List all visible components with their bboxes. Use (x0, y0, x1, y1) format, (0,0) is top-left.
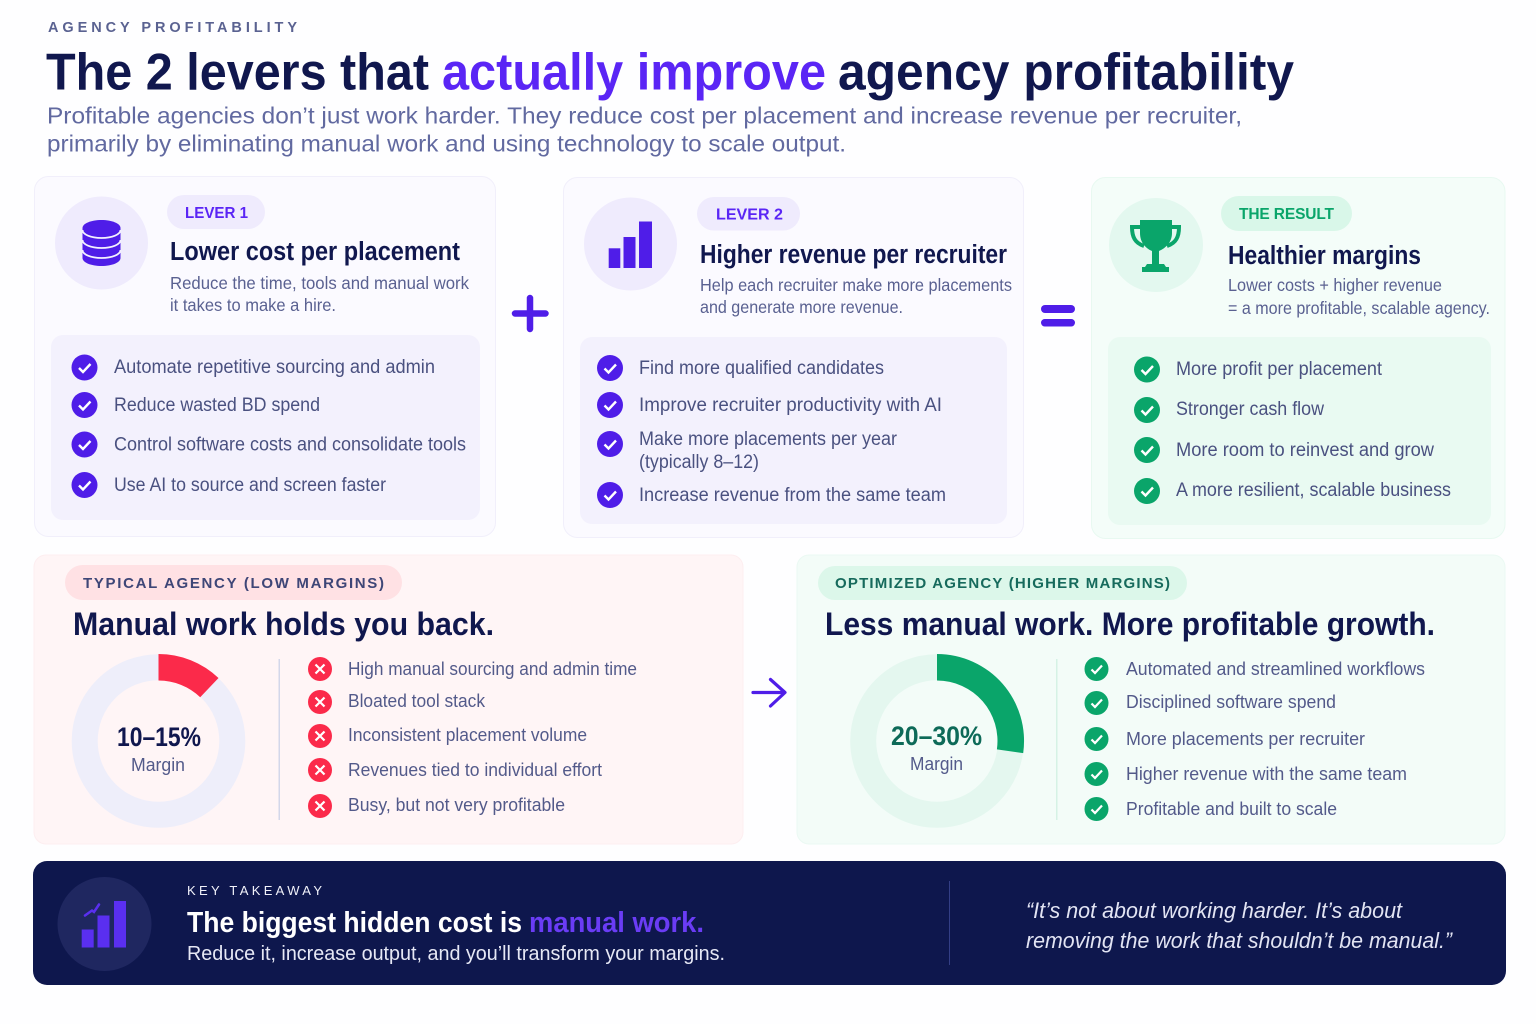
item: resilient (1134, 478, 1451, 504)
item: inconsistent volume: Inconsistent placement volume (348, 724, 587, 745)
item: reduce BD spend: Reduce wasted BD spend (114, 395, 320, 416)
donut chart: 10-15% margin: Margin (131, 754, 185, 775)
badge: the result: THE RESULT (1239, 206, 1335, 223)
subtitle: primarily by eliminating manual work and using technology to scale output. (47, 130, 846, 156)
label: key takeaway: KEY TAKEAWAY (187, 883, 322, 898)
quote: “It’s not about working harder. It’s about (1026, 898, 1403, 923)
item: profitable scale: Profitable and built to scale (1126, 798, 1337, 819)
item: bloated tool stack (308, 690, 486, 714)
item: more placements: (typically 8–12) (639, 452, 759, 473)
description: lever 1 (170, 273, 469, 315)
badge: the result (1221, 196, 1352, 231)
title: agency profitability (838, 44, 1294, 102)
item: disciplined spend: Disciplined software spend (1126, 691, 1336, 712)
badge: lever 1: LEVER 1 (185, 205, 248, 222)
panel: optimized agency (797, 555, 1505, 844)
item: automate (72, 354, 435, 380)
description: result (1228, 275, 1490, 318)
heading: higher revenue per recruiter: Higher revenue per recruiter (700, 241, 1007, 269)
item: stronger cash flow: Stronger cash flow (1176, 399, 1324, 420)
description: result: Lower costs + higher revenue (1228, 275, 1442, 295)
quote (1026, 898, 1454, 953)
icon: trophy (1109, 198, 1203, 292)
panel: lever 1 (34, 176, 496, 536)
checklist: lever 1 (51, 335, 480, 520)
item: recruiter productivity: Improve recruiter productivity with AI (639, 395, 942, 416)
badge: typical agency: TYPICAL AGENCY (LOW MARGINS) (83, 575, 384, 592)
donut chart: 20-30% margin: 20–30% (891, 721, 982, 751)
heading: manual work holds you back: Manual work holds you back. (73, 606, 494, 642)
heading: healthier margins: Healthier margins (1228, 242, 1421, 270)
item: reduce BD spend (72, 392, 320, 418)
description: lever 2: and generate more revenue. (700, 297, 903, 317)
icon: plus (515, 298, 546, 329)
description: lever 1: it takes to make a hire. (170, 295, 336, 315)
item: control software (72, 432, 466, 458)
donut chart: 20-30% margin: Margin (910, 753, 963, 774)
arrow (753, 680, 785, 706)
item: more profit (1134, 356, 1383, 382)
icon: bar chart (584, 198, 677, 290)
icon: equals (1041, 305, 1075, 326)
item: high manual time: High manual sourcing and admin time (348, 658, 637, 679)
panel: key takeaway banner (33, 861, 1506, 985)
list: typical agency problems (308, 657, 637, 818)
quote: removing the work that shouldn’t be manual.” (1026, 928, 1454, 953)
panel: typical agency (34, 555, 743, 844)
item: busy not profitable: Busy, but not very profitable (348, 794, 565, 815)
icon: growth chart (58, 877, 152, 971)
donut chart: 20-30% margin (863, 654, 1024, 815)
item: control software: Control software costs and consolidate tools (114, 434, 466, 456)
item: increase revenue (597, 482, 946, 508)
description: lever 2 (700, 275, 1012, 317)
item: bloated tool stack: Bloated tool stack (348, 690, 486, 711)
item: stronger cash flow (1134, 397, 1324, 423)
item: more placements (597, 429, 898, 473)
heading: biggest hidden cost: The biggest hidden cost is (187, 907, 522, 939)
badge: lever 2 (697, 197, 800, 230)
description: lever 2: Help each recruiter make more placements (700, 275, 1012, 295)
item: higher revenue: Higher revenue with the same team (1126, 763, 1407, 784)
item: reinvest (1134, 437, 1434, 463)
description: lever 1: Reduce the time, tools and manual work (170, 273, 469, 293)
title (46, 44, 1294, 102)
subtitle: Profitable agencies don’t just work harder. They reduce cost per placement and increase revenue per recruiter, (47, 102, 1242, 128)
heading: lower cost per placement: Lower cost per placement (170, 238, 460, 266)
item: reinvest: More room to reinvest and grow (1176, 440, 1434, 461)
checklist: result (1108, 337, 1491, 525)
item: use AI: Use AI to source and screen faster (114, 475, 387, 496)
panel: the result (1092, 178, 1505, 538)
donut chart: 10-15% margin (85, 654, 232, 815)
checklist: lever 2 (580, 337, 1007, 524)
item: more placements: More placements per recruiter (1126, 728, 1365, 749)
item: resilient: A more resilient, scalable business (1176, 480, 1451, 501)
item: increase revenue: Increase revenue from the same team (639, 485, 946, 506)
list: optimized agency benefits (1084, 657, 1425, 821)
item: more placements: Make more placements per year (639, 429, 898, 450)
title: The 2 levers that (46, 44, 429, 102)
heading: less manual work: Less manual work. More profitable growth. (825, 606, 1435, 642)
badge: lever 1 (167, 195, 265, 229)
text: reduce it: Reduce it, increase output, and you’ll transform your margins. (187, 943, 725, 965)
eyebrow: AGENCY PROFITABILITY (48, 20, 297, 36)
heading: biggest hidden cost: manual work. (529, 907, 704, 939)
title: actually improve (442, 44, 826, 102)
subtitle (47, 102, 1242, 156)
donut chart: 10-15% margin: 10–15% (117, 722, 201, 752)
badge: optimized agency (818, 566, 1187, 600)
icon: database (55, 196, 148, 290)
item: qualified candidates (597, 355, 884, 381)
description: result: = a more profitable, scalable agency. (1228, 298, 1490, 318)
item: use AI (72, 472, 387, 498)
panel: lever 2 (564, 178, 1024, 538)
item: automated workflows: Automated and streamlined workflows (1126, 658, 1425, 679)
badge: optimized agency: OPTIMIZED AGENCY (HIGHER MARGINS) (835, 575, 1170, 592)
badge: typical agency (65, 565, 402, 600)
item: revenues tied: Revenues tied to individual effort (348, 759, 602, 780)
item: automate: Automate repetitive sourcing and admin (114, 357, 435, 378)
item: qualified candidates: Find more qualified candidates (639, 358, 884, 379)
item: more profit: More profit per placement (1176, 359, 1383, 380)
badge: lever 2: LEVER 2 (716, 206, 783, 224)
